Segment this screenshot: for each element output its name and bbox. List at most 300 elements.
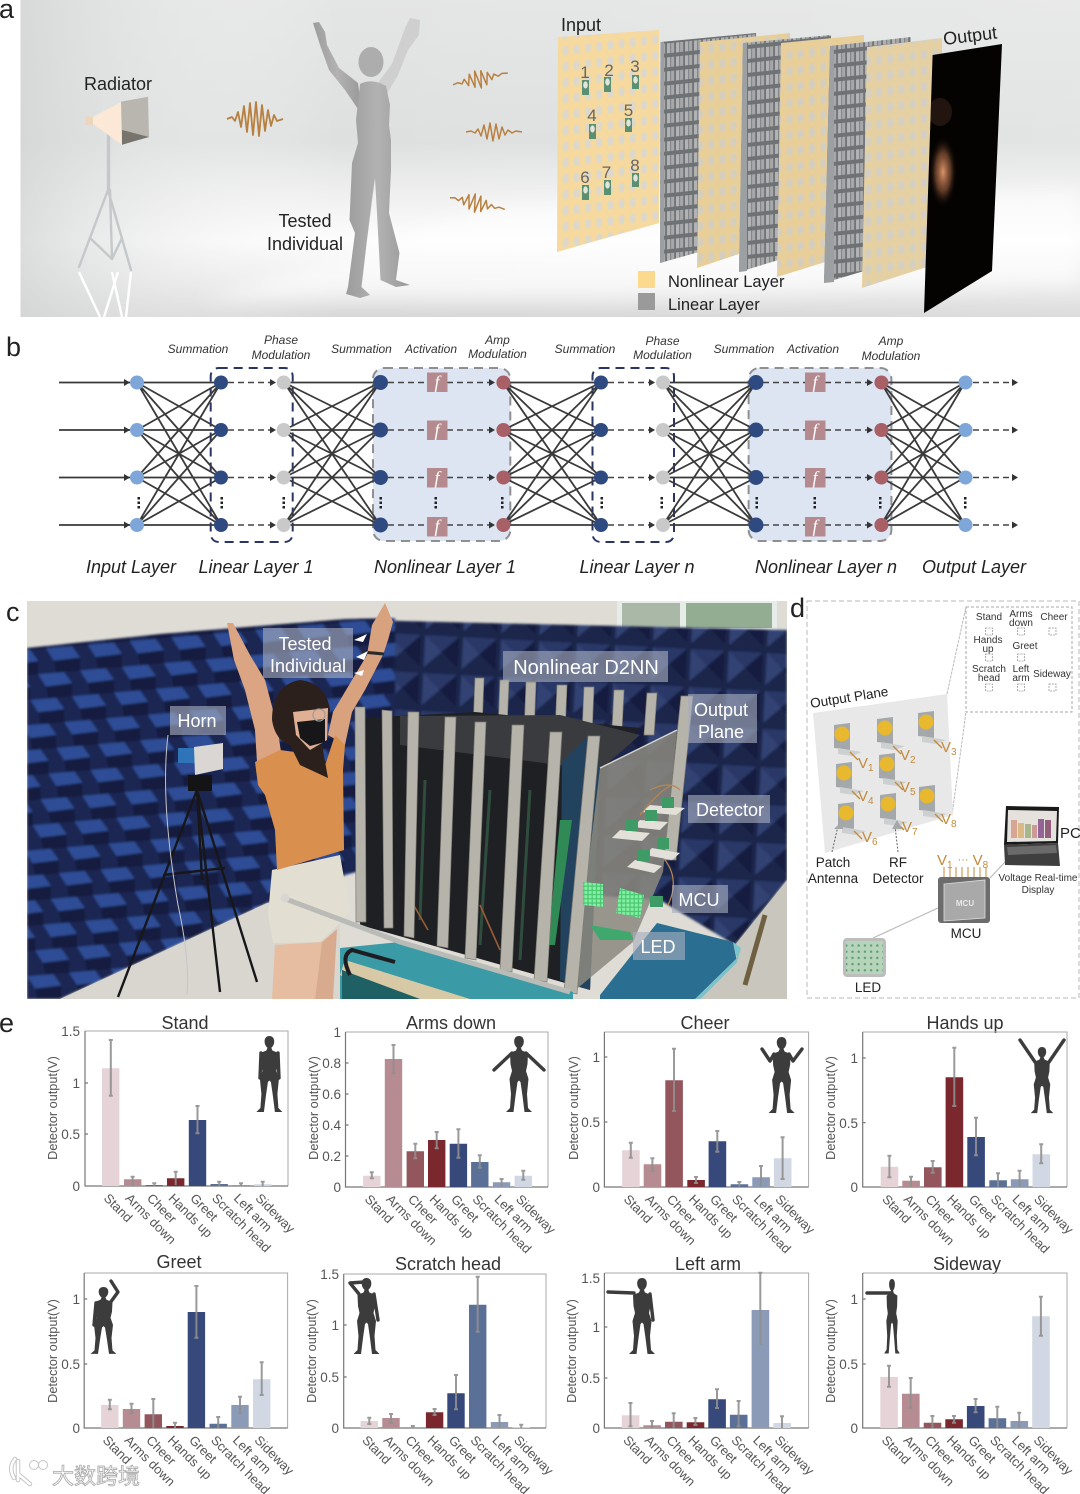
layer names: Linear Layer 1 (198, 557, 314, 577)
RF detector label: Detector (872, 871, 924, 886)
tick labels: 0 (850, 1421, 858, 1436)
input label: Input (561, 15, 601, 35)
title: Arms down (406, 1013, 496, 1033)
callout: detector (688, 795, 770, 823)
inset: pose regions: arm (1012, 673, 1030, 684)
icon: LED panel (843, 938, 886, 977)
error bars (628, 1273, 784, 1428)
x labels (362, 1192, 559, 1256)
x labels (620, 1433, 818, 1494)
activation function squares: f (812, 516, 820, 536)
error bars (370, 1045, 525, 1187)
tick labels (61, 1024, 80, 1194)
V1 to V8 label: V (937, 852, 947, 869)
chart: Left arm (565, 1254, 818, 1494)
x labels: Greet (707, 1192, 741, 1225)
nonlinear layer 1 box (373, 368, 510, 541)
voltage display label: Voltage Real-time (999, 873, 1078, 884)
axes (863, 1273, 1067, 1428)
title: Cheer (680, 1013, 730, 1033)
linear layer 1 box (211, 368, 293, 542)
axes (84, 1273, 288, 1428)
LED panels (583, 882, 644, 940)
horn antenna on tripod (118, 735, 257, 997)
x labels (100, 1433, 297, 1494)
x labels: Greet (446, 1433, 480, 1466)
tick labels: 0 (72, 1421, 80, 1436)
panel e: bar charts (0, 1008, 1077, 1494)
layer names (86, 557, 1027, 577)
voltage display label: Display (1022, 885, 1054, 896)
callout: MCU (672, 885, 728, 913)
dark layer boards (360, 712, 640, 990)
cross connections (137, 382, 965, 525)
inset: pose regions: Cheer (1040, 612, 1068, 623)
operation labels: Amp (878, 334, 904, 348)
inset: pose regions: Sideway (1033, 669, 1071, 680)
panel b: network architecture (6, 332, 1027, 577)
front aluminium posts (355, 707, 600, 994)
activation function squares: f (434, 420, 442, 440)
x labels: Sideway (1031, 1433, 1076, 1478)
x labels: Sideway (772, 1192, 818, 1237)
tick labels: 1 (592, 1320, 600, 1335)
x labels: Stand (879, 1433, 914, 1467)
voltage labels: 3 (951, 747, 957, 758)
RF detector label (872, 855, 924, 886)
x labels: Cheer (405, 1192, 441, 1228)
x labels: Hands up (944, 1192, 994, 1241)
tick labels: 0.5 (581, 1371, 600, 1386)
input numbers: 2 (604, 61, 614, 80)
input numbers: 3 (630, 57, 640, 76)
callout: tested individual: Tested (278, 634, 332, 654)
voltage labels: 2 (910, 755, 916, 766)
inset: pose regions: Greet (1012, 641, 1038, 652)
callout: LED (633, 932, 685, 960)
axes (604, 1273, 809, 1428)
x labels: Cheer (923, 1192, 959, 1228)
x labels: Left arm (230, 1433, 274, 1477)
voltage labels: V (941, 811, 951, 828)
operation labels: Amp (484, 333, 510, 347)
diffractive rig rear posts (473, 678, 693, 860)
inset: pose regions: Stand (976, 612, 1002, 623)
activation function squares: f (434, 468, 442, 488)
activation function squares: f (812, 468, 820, 488)
V1 to V8 label: V (973, 852, 983, 869)
error bars (629, 1049, 785, 1187)
tick labels: 1.5 (61, 1024, 80, 1039)
x labels: Stand (879, 1192, 914, 1226)
tested individual label (267, 211, 343, 254)
x labels: Cheer (403, 1433, 439, 1469)
callout: nonlinear D2NN: Nonlinear D2NN (513, 657, 659, 679)
MCU label: MCU (951, 926, 981, 941)
layer names: Nonlinear Layer 1 (374, 557, 516, 577)
x labels (101, 1191, 298, 1255)
detector boards (612, 785, 685, 907)
x labels: Sideway (253, 1191, 298, 1236)
tick labels: 0.5 (839, 1357, 858, 1372)
tick labels: 0 (333, 1180, 341, 1195)
silhouette (762, 1037, 802, 1113)
person (227, 603, 393, 999)
V1 to V8 label: 1 (947, 860, 953, 871)
chart: Hands up (824, 1013, 1077, 1256)
chart: Arms down (307, 1013, 559, 1256)
activation function squares (427, 372, 826, 536)
dashed border (807, 601, 1079, 998)
tick labels: 1 (333, 1025, 341, 1040)
y axis label: Detector output(V) (567, 1056, 581, 1160)
voltage labels: V (900, 747, 910, 764)
output label: Output (942, 23, 998, 49)
RF detector label: RF (889, 855, 907, 870)
activation function squares: f (812, 420, 820, 440)
floor (60, 902, 269, 999)
layer names: Nonlinear Layer n (755, 557, 897, 577)
silhouette (350, 1278, 380, 1354)
radiator label: Radiator (84, 74, 152, 94)
chart: Sideway (824, 1254, 1076, 1494)
panel a: physical system scene (0, 0, 1080, 317)
label b: b (6, 332, 21, 362)
x labels: Greet (707, 1433, 741, 1466)
network nodes (130, 375, 972, 532)
x labels: Cheer (664, 1433, 700, 1469)
window (617, 601, 777, 631)
tick labels: 0.6 (322, 1087, 341, 1102)
y axis label: Detector output(V) (824, 1056, 838, 1160)
V1 to V8 label: ··· (958, 854, 969, 866)
silhouette (494, 1036, 544, 1112)
x labels: Sideway (511, 1433, 557, 1478)
inset: pose regions (966, 607, 1072, 712)
x labels (879, 1433, 1076, 1494)
tick labels: 0.5 (581, 1115, 600, 1130)
operation labels: Modulation (633, 348, 692, 362)
x labels: Arms down (642, 1192, 699, 1248)
x labels: Stand (100, 1433, 135, 1467)
nonlinear layer n box (749, 368, 891, 541)
operation labels: Summation (714, 342, 775, 356)
input numbers: 4 (587, 106, 597, 125)
x labels: Hands up (944, 1433, 994, 1482)
x labels: Arms down (642, 1433, 698, 1489)
x labels: Sideway (1031, 1192, 1077, 1237)
detail pointers (832, 820, 902, 852)
axes (344, 1274, 546, 1428)
x labels: Greet (186, 1433, 220, 1466)
tick labels: 0.5 (61, 1127, 80, 1142)
voltage labels: 8 (951, 819, 957, 830)
activation function squares: f (812, 372, 820, 392)
tick labels: 0 (331, 1421, 339, 1436)
tick labels (61, 1292, 80, 1436)
output plane label: Output Plane (809, 684, 889, 711)
panel d: output schematic (790, 593, 1080, 998)
input numbers (580, 57, 640, 187)
icon: incident wave (227, 102, 283, 136)
label d: d (790, 593, 805, 623)
chart: Scratch head (305, 1254, 557, 1494)
panel c: experimental photograph (6, 597, 787, 999)
callout: horn: Horn (177, 711, 217, 731)
bars (622, 1310, 791, 1428)
watermark logo (11, 1459, 47, 1484)
tick labels: 0 (592, 1421, 600, 1436)
x labels: Greet (448, 1192, 482, 1225)
tick labels (839, 1292, 858, 1436)
tick labels: 0.5 (320, 1370, 339, 1385)
x labels: Left arm (1009, 1192, 1054, 1236)
silhouette (90, 1281, 118, 1354)
operation labels (168, 333, 921, 363)
x labels: Cheer (664, 1192, 700, 1228)
x labels: Left arm (750, 1433, 795, 1477)
operation labels: Activation (786, 342, 839, 356)
x labels: Greet (187, 1191, 221, 1224)
silhouette (256, 1036, 282, 1112)
x labels: Arms down (901, 1433, 957, 1489)
tick labels: 0.8 (322, 1056, 341, 1071)
silhouette (867, 1279, 900, 1353)
layer names: Linear Layer n (579, 557, 695, 577)
title: Sideway (933, 1254, 1001, 1274)
x labels: Sideway (513, 1192, 559, 1237)
x labels: Stand (620, 1433, 655, 1467)
operation labels: Summation (555, 342, 616, 356)
callout: output plane (688, 694, 757, 743)
callout: horn (170, 706, 226, 735)
title: Stand (161, 1013, 209, 1033)
tick labels: 1 (850, 1051, 858, 1066)
diffractive layer stack (660, 33, 942, 288)
voltage labels: V (862, 829, 872, 846)
tick labels: 1 (72, 1076, 80, 1091)
wires (873, 862, 1005, 938)
icon: scattered waves (448, 64, 522, 218)
tick labels: 1.5 (581, 1271, 600, 1286)
axes (346, 1032, 548, 1187)
legend: Nonlinear Layer (668, 273, 785, 291)
patch antenna label: Patch (816, 855, 850, 870)
voltage labels: 4 (868, 796, 874, 807)
x labels: Cheer (144, 1191, 180, 1227)
inset: pose regions: up (982, 644, 994, 655)
vertical ellipsis dots (138, 497, 966, 508)
activation function squares: f (434, 516, 442, 536)
tick labels: 0 (850, 1180, 858, 1195)
bars (101, 1312, 270, 1428)
callout: output plane: Plane (698, 722, 744, 742)
operation labels: Summation (331, 342, 392, 356)
callout: nonlinear D2NN (503, 651, 668, 682)
x labels: Stand (621, 1192, 656, 1226)
icon: tripod with horn (79, 97, 149, 317)
panel a background (20, 0, 1080, 317)
label c: c (6, 597, 20, 627)
axes (85, 1031, 288, 1186)
input numbers: 7 (602, 163, 611, 182)
icon: MCU chip (938, 867, 990, 923)
x labels: Cheer (922, 1433, 958, 1469)
callout: tested individual: Individual (270, 656, 346, 676)
tick labels: 0.4 (322, 1118, 341, 1133)
chart: Cheer (567, 1013, 818, 1256)
inset: pose regions: Left (1013, 664, 1030, 675)
callout: tested individual (263, 628, 353, 678)
x labels: Cheer (143, 1433, 179, 1469)
V1 to V8 label: 8 (983, 860, 989, 871)
inset: pose regions: Hands (974, 635, 1002, 646)
inset connectors (947, 607, 966, 815)
x labels (879, 1192, 1077, 1256)
error bars (109, 1040, 265, 1186)
output plane (813, 694, 953, 853)
y axis label: Detector output(V) (46, 1299, 60, 1403)
voltage labels: 7 (912, 827, 918, 838)
tick labels (839, 1051, 858, 1195)
tick labels: 1 (850, 1292, 858, 1307)
wall (27, 601, 787, 999)
bars (102, 1068, 271, 1186)
x labels: Sideway (772, 1433, 818, 1478)
layer names: Output Layer (922, 557, 1027, 577)
x labels: Sideway (252, 1433, 297, 1478)
tick labels: 0 (72, 1179, 80, 1194)
tick labels: 0.5 (839, 1116, 858, 1131)
input lines (59, 382, 130, 525)
y axis label: Detector output(V) (305, 1299, 319, 1403)
callout: detector: Detector (696, 800, 764, 820)
input numbers: 6 (580, 168, 590, 187)
tick labels (581, 1050, 600, 1195)
x labels: Greet (966, 1192, 1000, 1225)
title: Scratch head (395, 1254, 501, 1274)
x labels: Hands up (424, 1433, 474, 1482)
inset: pose regions: Scratch (972, 664, 1006, 675)
silhouette (608, 1278, 655, 1354)
tick labels: 1 (72, 1292, 80, 1307)
x labels (621, 1192, 818, 1256)
voltage labels: V (902, 819, 912, 836)
x labels: Left arm (1009, 1433, 1053, 1477)
x labels: Arms down (901, 1192, 957, 1248)
bars (622, 1080, 792, 1187)
x labels: Left arm (489, 1433, 534, 1477)
blue foam mat and teal base (280, 894, 741, 999)
x labels: Left arm (491, 1192, 536, 1236)
output plate (548, 730, 677, 992)
operation labels: Summation (168, 342, 229, 356)
axes (604, 1032, 809, 1187)
bars (361, 1305, 530, 1428)
title: Greet (156, 1252, 202, 1272)
activation function squares: f (434, 372, 442, 392)
photo scene (27, 601, 787, 999)
x labels (359, 1433, 557, 1494)
voltage display label (999, 873, 1078, 896)
silhouette (1020, 1040, 1064, 1113)
callout: output plane: Output (694, 700, 748, 720)
x labels: Arms down (383, 1192, 440, 1248)
voltage labels: V (858, 755, 868, 772)
layer names: Input Layer (86, 557, 177, 577)
tick labels: 1 (592, 1050, 600, 1065)
left absorber wall (27, 618, 395, 999)
output plane (924, 44, 1002, 313)
input layer (557, 30, 659, 252)
x labels: Scratch head (209, 1191, 274, 1255)
operation labels: Modulation (468, 347, 527, 361)
arrowheads (124, 379, 1018, 528)
error bars (887, 1048, 1043, 1187)
tested individual label: Individual (267, 234, 343, 254)
legend (638, 271, 785, 314)
watermark (11, 1459, 140, 1489)
chart: Stand (46, 1013, 298, 1255)
x labels: Hands up (427, 1192, 477, 1241)
tick labels: 1.5 (320, 1267, 339, 1282)
callout: LED: LED (640, 937, 676, 957)
x labels: Stand (362, 1192, 397, 1226)
operation labels: Phase (264, 333, 298, 347)
tick labels (320, 1267, 339, 1436)
tick labels: 0 (592, 1180, 600, 1195)
voltage labels: 5 (910, 787, 916, 798)
y axis label: Detector output(V) (307, 1056, 321, 1160)
icon: MCU chip: MCU (956, 899, 974, 908)
x labels: Scratch head (470, 1192, 534, 1256)
inset: pose regions: Arms (1009, 609, 1033, 620)
voltage labels: V (858, 788, 868, 805)
tick labels (581, 1271, 600, 1436)
photo arrowheads (354, 634, 368, 676)
voltage labels: 6 (872, 837, 878, 848)
chart: Greet (46, 1252, 297, 1494)
tick labels: 0.2 (322, 1149, 341, 1164)
x labels: Left arm (751, 1192, 795, 1236)
input numbers: 8 (630, 156, 640, 175)
tick labels (322, 1025, 341, 1195)
y axis label: Detector output(V) (46, 1056, 60, 1160)
bars (363, 1059, 532, 1187)
patch antenna label: Antenna (808, 871, 859, 886)
input numbers: 5 (624, 101, 633, 120)
operation labels: Modulation (252, 348, 311, 362)
dashed links (228, 382, 1012, 525)
right absorber wall (360, 620, 787, 945)
linear layer n box (592, 368, 674, 542)
error bars (887, 1297, 1043, 1428)
voltage labels: 1 (868, 763, 874, 774)
x labels: Arms down (122, 1433, 178, 1489)
patch antenna label (808, 855, 859, 886)
x labels: Hands up (166, 1191, 216, 1240)
patch antennas (834, 711, 947, 839)
input port tags (582, 75, 639, 200)
error bars (367, 1277, 523, 1428)
x labels: Scratch head (729, 1192, 794, 1256)
operation labels: Phase (645, 334, 680, 348)
x labels: Arms down (381, 1433, 437, 1489)
inset: pose regions: head (978, 673, 1000, 684)
title: Hands up (926, 1013, 1004, 1033)
inset: pose regions: down (1009, 618, 1033, 629)
y axis label: Detector output(V) (565, 1299, 579, 1403)
